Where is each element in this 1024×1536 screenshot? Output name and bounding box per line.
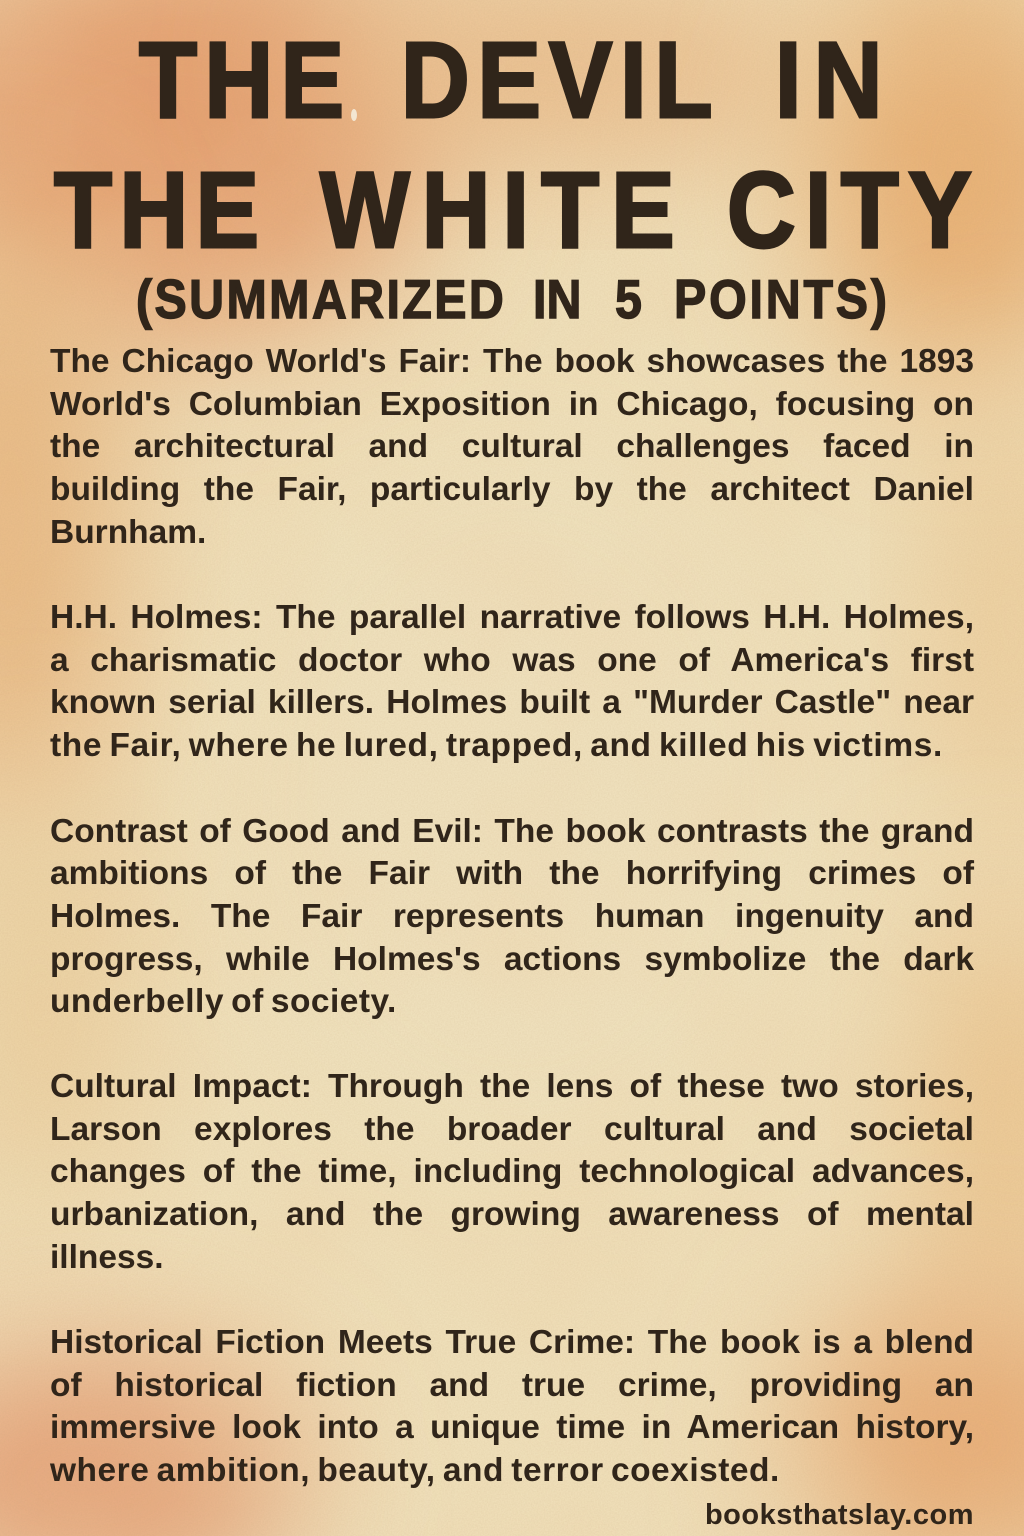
text block: Historical Fiction Meets True Crime: where ambition, beauty, and terror coexisted. xyxy=(50,1452,780,1489)
text block: Contrast of Good and Evil xyxy=(50,812,974,1020)
text block: The Chicago World's Fair: The Chicago World's Fair: The book showcases the 1893 xyxy=(50,343,974,380)
title line 1: IN xyxy=(775,19,882,140)
subtitle: (SUMMARIZED xyxy=(136,268,504,330)
text block: H.H. Holmes: a charismatic doctor who was one of America's first xyxy=(50,642,974,679)
title line 2: WHITE xyxy=(320,149,675,270)
text block: H.H. Holmes: known serial killers. Holmes built a "Murder Castle" near xyxy=(50,684,974,721)
text block: Historical Fiction Meets True Crime: Historical Fiction Meets True Crime: The book is a blend xyxy=(50,1324,974,1361)
text block: H.H. Holmes: the Fair, where he lured, trapped, and killed his victims. xyxy=(50,727,943,764)
text block: The Chicago World's Fair: World's Columbian Exposition in Chicago, focusing on xyxy=(50,386,974,423)
text block: Historical Fiction Meets True Crime: immersive look into a unique time in American history, xyxy=(50,1409,974,1446)
text block: H.H. Holmes xyxy=(50,599,974,764)
text block: The Chicago World's Fair: Burnham. xyxy=(50,514,206,551)
text block: Cultural Impact: Cultural Impact: Through the lens of these two stories, xyxy=(50,1068,974,1105)
text block: Cultural Impact xyxy=(50,1068,974,1276)
text block: Contrast of Good and Evil: Holmes. The Fair represents human ingenuity and xyxy=(50,898,974,935)
text block: Cultural Impact: changes of the time, including technological advances, xyxy=(50,1153,974,1190)
text block: The Chicago World's Fair: the architectural and cultural challenges faced in xyxy=(50,428,974,465)
title line 1 xyxy=(139,19,882,140)
text block: Cultural Impact: illness. xyxy=(50,1239,164,1276)
text block: H.H. Holmes: H.H. Holmes: The parallel narrative follows H.H. Holmes, xyxy=(50,599,974,636)
subtitle: IN xyxy=(533,268,581,330)
subtitle: 5 xyxy=(615,268,642,330)
text block: Contrast of Good and Evil: Contrast of Good and Evil: The book contrasts the grand xyxy=(50,812,974,850)
text block: Contrast of Good and Evil: ambitions of the Fair with the horrifying crimes of xyxy=(50,855,974,892)
text block: The Chicago World's Fair xyxy=(50,343,974,551)
footer: website credit: booksthatslay.com xyxy=(705,1499,974,1531)
title line 1: DEVIL xyxy=(401,19,713,140)
text block: Contrast of Good and Evil: progress, while Holmes's actions symbolize the dark xyxy=(50,941,974,978)
title line 1: THE xyxy=(139,19,344,140)
title line 2: CITY xyxy=(727,149,972,270)
title line 2 xyxy=(54,149,972,270)
text block: Cultural Impact: urbanization, and the growing awareness of mental xyxy=(50,1196,974,1233)
subtitle: POINTS) xyxy=(674,268,887,330)
text block: The Chicago World's Fair: building the Fair, particularly by the architect Daniel xyxy=(50,471,974,508)
text block: Cultural Impact: Larson explores the broader cultural and societal xyxy=(50,1111,974,1148)
title line 2: THE xyxy=(54,149,259,270)
subtitle xyxy=(136,268,887,330)
text block: Contrast of Good and Evil: underbelly of society. xyxy=(50,983,397,1020)
text block: Historical Fiction Meets True Crime: of historical fiction and true crime, providing an xyxy=(50,1367,974,1404)
text block: Historical Fiction Meets True Crime xyxy=(50,1324,974,1489)
title xyxy=(54,19,972,330)
